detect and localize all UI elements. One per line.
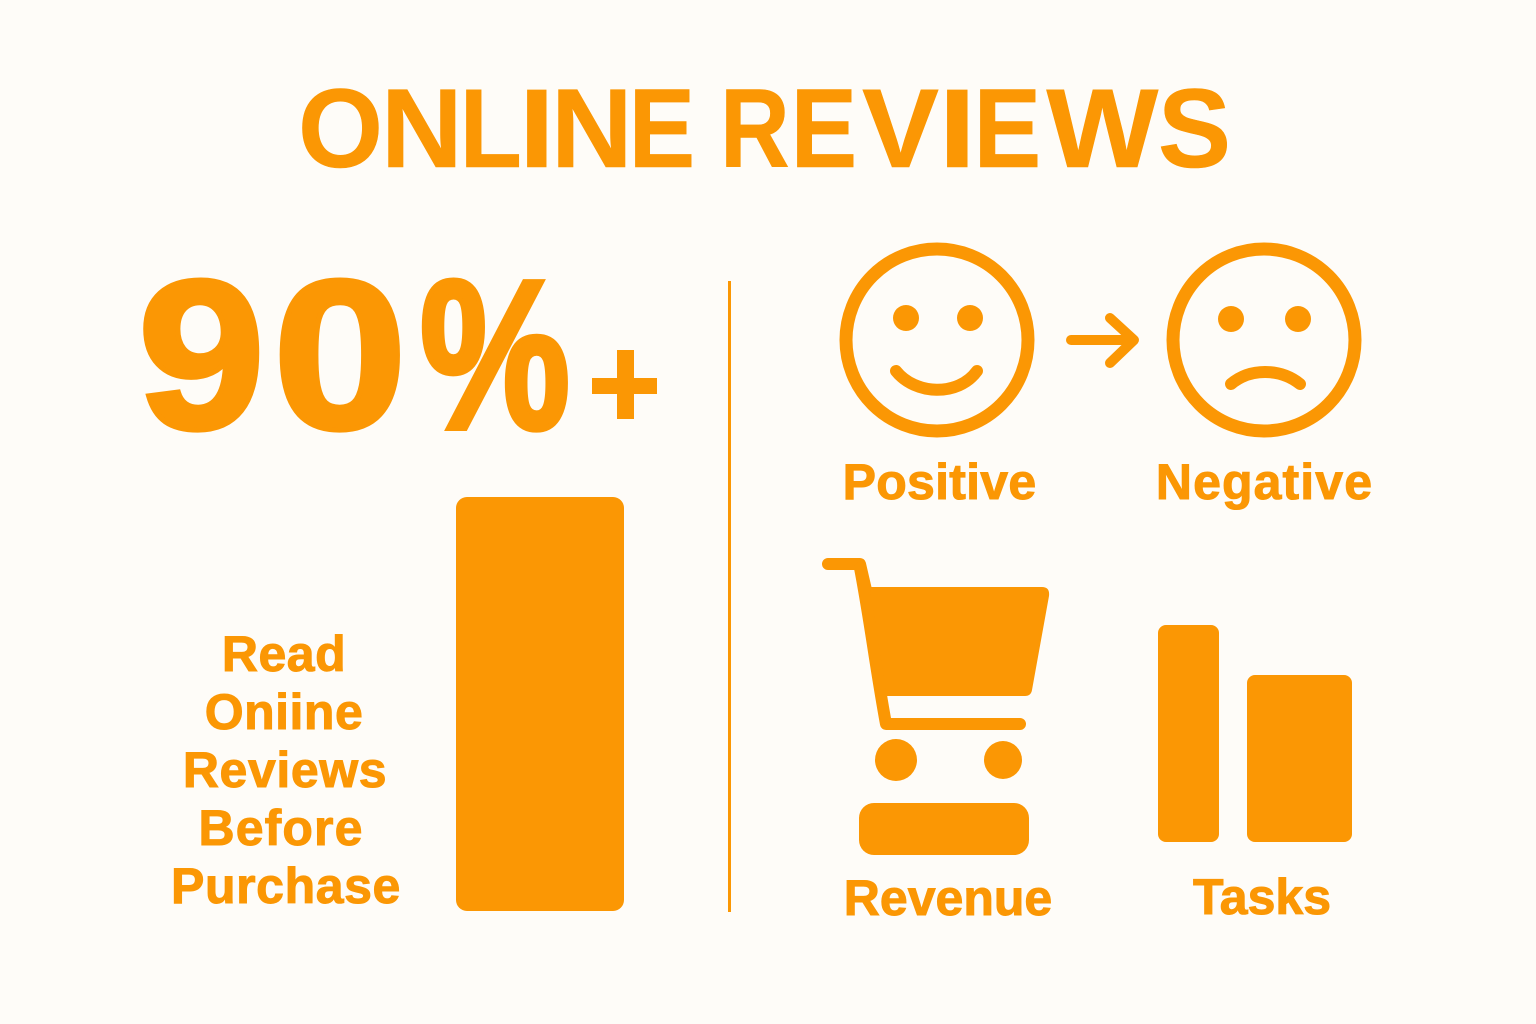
text: read online reviews before purchase: Purchase bbox=[171, 858, 401, 914]
statistic: 90%+: % bbox=[420, 236, 570, 473]
text: read online reviews before purchase: Oniine bbox=[205, 684, 363, 740]
icon: smiling face bbox=[846, 249, 1028, 431]
title: R bbox=[720, 66, 790, 191]
title: I bbox=[938, 66, 976, 191]
label: tasks: Tasks bbox=[1193, 869, 1331, 925]
title: L bbox=[460, 66, 522, 191]
title: V bbox=[862, 66, 939, 191]
icon: tasks bars bbox=[1158, 625, 1352, 842]
label: negative: Negative bbox=[1156, 454, 1373, 510]
text: read online reviews before purchase: Before bbox=[199, 800, 363, 856]
statistic: 90%+ bbox=[138, 236, 657, 473]
title: I bbox=[519, 66, 555, 191]
title: S bbox=[1158, 66, 1231, 191]
title: E bbox=[791, 66, 857, 191]
arrow: positive to negative bbox=[1071, 318, 1134, 363]
text: read online reviews before purchase: Read bbox=[222, 626, 346, 682]
title: E bbox=[629, 66, 695, 191]
title: W bbox=[1046, 66, 1159, 191]
icon: shopping cart bbox=[828, 564, 1049, 855]
statistic: 90%+: 0 bbox=[273, 236, 407, 473]
title: O bbox=[298, 66, 383, 191]
title: E bbox=[974, 66, 1041, 191]
bar: 90 percent bbox=[456, 497, 624, 911]
icon: sad face bbox=[1173, 249, 1355, 431]
label: positive: Positive bbox=[843, 454, 1036, 510]
text: read online reviews before purchase: Reviews bbox=[183, 742, 387, 798]
title: N bbox=[381, 66, 463, 191]
divider bbox=[728, 281, 731, 912]
title: N bbox=[551, 66, 633, 191]
statistic: 90%+: 9 bbox=[138, 236, 265, 473]
text: read online reviews before purchase bbox=[171, 626, 401, 914]
label: revenue: Revenue bbox=[844, 870, 1052, 926]
